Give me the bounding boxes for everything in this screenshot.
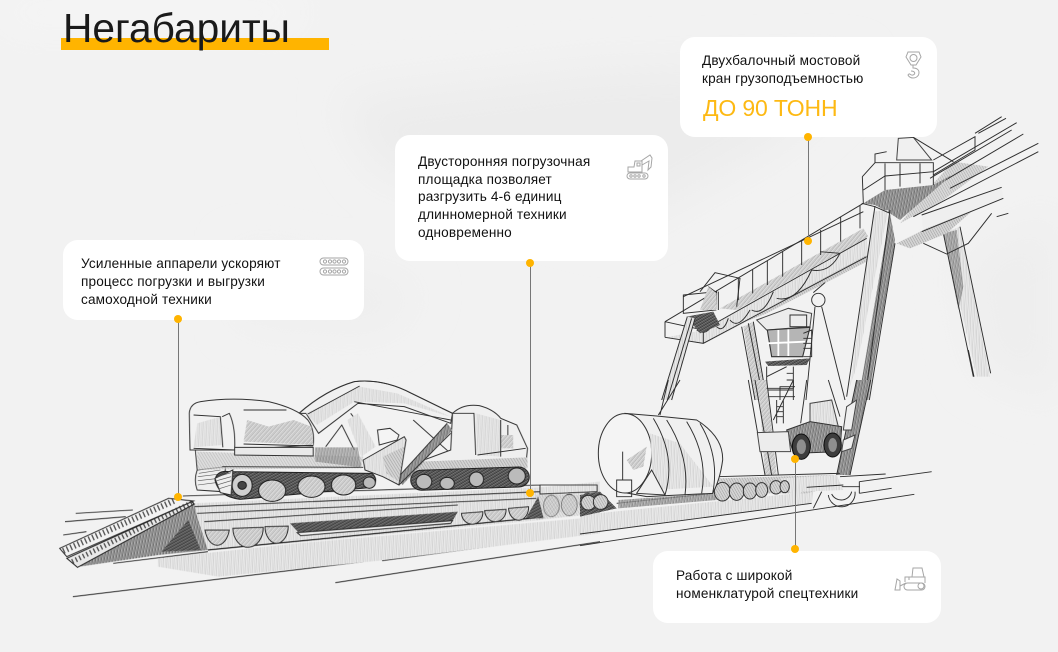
text: machinery: Работа с широкой <box>676 568 792 583</box>
trailer wheels <box>205 493 596 547</box>
wheel loader <box>757 400 842 459</box>
text: loading platform <box>418 154 590 240</box>
illustration: low-bed trailer with excavator <box>60 381 600 597</box>
icon: hook <box>906 52 922 78</box>
cylinder load <box>598 413 723 497</box>
trailer deck <box>183 482 600 550</box>
excavator rear track <box>195 467 226 492</box>
connector: crane <box>808 137 809 241</box>
illustration: cylinder load, lower trailer and wheel loader <box>580 380 932 546</box>
marker: ramp bottom <box>174 493 182 501</box>
text: machinery <box>676 568 858 601</box>
panel: crane <box>680 37 937 137</box>
icon: bulldozer <box>894 568 926 590</box>
excavator rear body <box>189 399 363 470</box>
middle leg and cabin <box>742 308 812 400</box>
title: Негабариты <box>63 5 290 51</box>
upper beam extension <box>897 117 1038 248</box>
icon: ramp plates <box>320 258 348 276</box>
excavator right track <box>410 467 530 491</box>
text: loading platform: разгрузить 4-6 единиц <box>418 189 562 204</box>
text: capacity: ДО 90 ТОНН <box>703 95 837 121</box>
marker: ramp card <box>174 315 182 323</box>
excavator arm and bucket <box>363 423 452 485</box>
text: loading platform: Двусторонняя погрузочная <box>418 154 590 169</box>
panel: loading platform <box>395 135 668 261</box>
big right leg <box>847 203 895 400</box>
heading underline <box>61 38 329 50</box>
icon: excavator <box>626 154 652 180</box>
connector: loading platform <box>530 263 531 493</box>
text: loading platform: одновременно <box>418 225 512 240</box>
text: crane <box>702 53 863 86</box>
ground lines left <box>63 510 600 597</box>
panel: machinery <box>653 551 941 623</box>
lower trailer section <box>580 473 843 517</box>
marker: machinery top <box>791 455 799 463</box>
shadow under trailer <box>158 517 600 577</box>
left leg <box>662 317 695 400</box>
lower crane legs <box>658 380 871 475</box>
marker: platform card <box>526 259 534 267</box>
excavator front track <box>215 470 376 501</box>
connector: ramp <box>178 320 179 497</box>
main bridge girder <box>665 203 868 343</box>
hoist sling <box>806 283 845 400</box>
text: machinery: номенклатурой спецтехники <box>676 586 858 601</box>
excavator boom <box>299 381 456 458</box>
marker: crane bottom <box>804 237 812 245</box>
excavator right body <box>411 405 527 473</box>
text: crane: Двухбалочный мостовой <box>702 53 860 68</box>
marker: machinery card <box>791 545 799 553</box>
cabin platform upper <box>862 137 975 220</box>
text: ramps: самоходной техники <box>81 292 212 307</box>
marker: crane card <box>804 133 812 141</box>
text: ramps: Усиленные аппарели ускоряют <box>81 256 281 271</box>
ramp <box>60 498 208 567</box>
connector: machinery <box>795 459 796 549</box>
text: ramps: процесс погрузки и выгрузки <box>81 274 265 289</box>
illustration: gantry crane <box>662 117 1038 400</box>
text: ramps <box>81 256 281 307</box>
text: crane: кран грузоподъемностью <box>702 71 863 86</box>
marker: platform bottom <box>526 489 534 497</box>
far right leg <box>923 213 992 377</box>
text: loading platform: длинномерной техники <box>418 207 567 222</box>
panel: ramps <box>63 240 364 320</box>
text: loading platform: площадка позволяет <box>418 172 552 187</box>
shadow and ground lines <box>580 472 932 546</box>
